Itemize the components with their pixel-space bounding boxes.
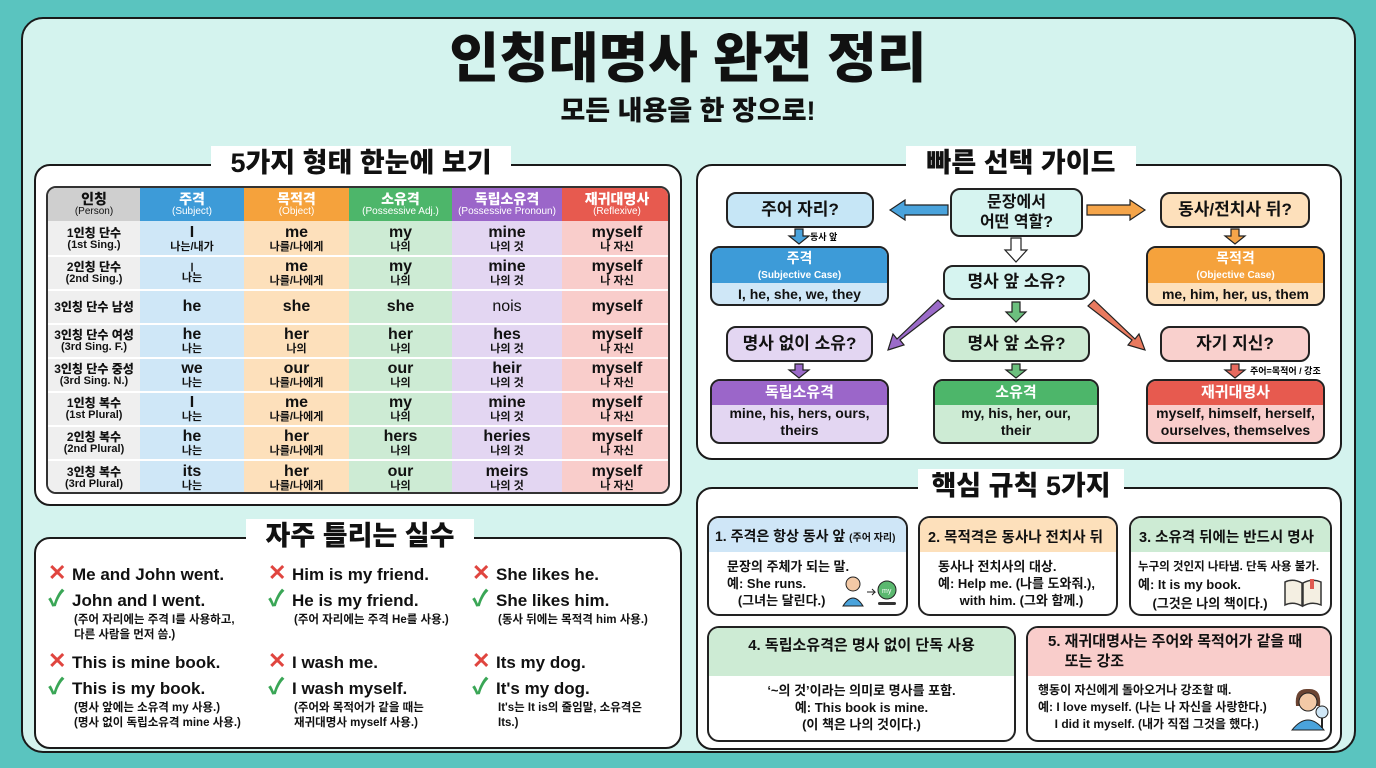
pronoun table: I [190,394,194,411]
pronoun table: he [183,428,201,445]
pronoun table: 재귀대명사 [585,191,649,207]
pronoun table: (2nd Sing.) [66,273,122,285]
pronoun table: 2인칭 복수 [67,430,121,444]
pronoun table: her [388,326,413,343]
icon: person to my: my [882,588,892,595]
pronoun table: 나 자신 [600,411,634,423]
mistake 6: ✓ [472,674,488,699]
mistake 6: Its my dog. [496,653,586,672]
pronoun table: 나의 [390,480,411,492]
flow: 자기 지신?: 자기 지신? [1196,334,1274,353]
pronoun table: 인칭 [81,191,107,207]
flow: 독립소유격 box: theirs [780,422,819,438]
flow: 재귀대명사 box: 재귀대명사 [1201,384,1270,401]
flow: 명사 없이 소유?: 명사 없이 소유? [743,334,856,353]
flow: 명사 앞 소유? top: 명사 앞 소유? [967,272,1066,291]
flow: 명사 앞 소유? green: 명사 앞 소유? [967,334,1066,353]
flow: center question: 어떤 역할? [980,214,1053,230]
pronoun table: myself [592,298,642,315]
arrows: flow: 주어=목적어 / 강조 [1250,365,1321,376]
mistake 1: ✓ [48,586,64,611]
pronoun table: 나를/나에게 [270,411,323,423]
mistake 5: ✓ [268,674,284,699]
flow: 명사 앞 소유? top [943,265,1090,300]
pronoun table: 나의 것 [490,343,524,355]
pronoun table: she [387,298,414,315]
pronoun table: 나의 것 [490,411,524,423]
rule 1 [707,516,908,616]
rows: (1st Sing.) [67,239,121,251]
flow: 명사 앞 소유? green [943,326,1090,362]
pronoun table: he [183,298,201,315]
mistake 5: (주어와 목적어가 같을 때는 [294,702,424,714]
pronoun table: her [284,463,309,480]
mistake 4: This is mine book. [72,653,220,672]
pronoun table: 나의 [286,343,307,355]
pronoun table: our [284,360,309,377]
pronoun table: 나는 [182,445,202,457]
pronoun table: 나의 [390,445,411,457]
pronoun table: mine [488,258,526,275]
pronoun table: 3인칭 복수 [67,465,121,479]
rule 3: (그것은 나의 책이다.) [1152,596,1268,611]
pronoun table: 나는 [182,343,202,355]
flow: 소유격 box [933,379,1099,444]
pronoun table: (2nd Plural) [64,443,124,455]
rows: 1인칭 단수 [67,226,121,240]
pronoun table: me [285,258,308,275]
pronoun table: 나는/내가 [170,241,214,253]
mistake 1 [48,560,235,641]
pronoun table: 나 자신 [600,275,634,287]
icon: book [1284,579,1322,608]
mistake 5 [268,648,424,729]
mistake 4: ✕ [48,648,66,673]
mistake 2: ✕ [268,560,286,585]
pronoun table: 2인칭 단수 [67,260,121,274]
panel: rules [696,487,1342,750]
pronoun table: myself [592,224,642,241]
pronoun table: my [389,394,412,411]
pronoun table: ꞁ [190,260,194,272]
flow: 독립소유격 box: 독립소유격 [765,384,834,401]
mistake 3 [472,560,648,626]
rule 1: (그녀는 달린다.) [738,593,825,608]
rule 1: 문장의 주체가 되는 말. [727,559,849,574]
flow: center question: 문장에서 [987,194,1046,211]
pronoun table: 나는 [182,272,202,284]
pronoun table: heries [483,428,531,445]
pronoun table: meirs [486,463,528,480]
mistake 2: Him is my friend. [292,565,429,584]
rule 1: 1. 주격은 항상 동사 앞 (주어 자리) [715,528,895,544]
mistake 5: I wash myself. [292,679,407,698]
pronoun table: (3rd Plural) [65,478,123,490]
pronoun table: 나는 [182,480,202,492]
mistake 3: She likes he. [496,565,599,584]
mistake 4: ✓ [48,674,64,699]
pronoun table: myself [592,360,642,377]
pronoun table: 나를/나에게 [270,275,323,287]
rule 4: 예: This book is mine. [795,700,928,715]
rule 1: 예: She runs. [727,576,806,591]
rule 2: 2. 목적격은 동사나 전치사 뒤 [928,530,1103,546]
flow: 소유격 box: their [1001,422,1031,438]
mistake 2: He is my friend. [292,591,419,610]
icon: person to my [842,576,896,606]
pronoun table: (Possessive Pronoun) [458,206,556,217]
heading: flow: 빠른 선택 가이드 [927,148,1115,178]
panel: flow guide [696,164,1342,460]
pronoun table: 나 자신 [600,445,634,457]
flow: 목적격 box: 목적격 [1216,250,1255,266]
flow: 주어 자리?: 주어 자리? [761,200,839,219]
pronoun table: (Possessive Adj.) [362,206,439,217]
pronoun table: my [389,224,412,241]
pronoun table: 나의 [390,411,411,423]
rule 3: 3. 소유격 뒤에는 반드시 명사 [1139,530,1314,546]
mistake 3: ✕ [472,560,490,585]
pronoun table: 나의 [390,343,411,355]
pronoun table: myself [592,463,642,480]
flow: 주격 box: (Subjective Case) [758,270,841,280]
arrows: flow: 동사 앞 [810,231,838,242]
mistake 6: It's는 It is의 줄임말, 소유격은 [498,702,642,714]
pronoun table: (3rd Sing. F.) [61,341,127,353]
pronoun table: myself [592,326,642,343]
flow: 자기 지신? [1160,326,1310,362]
pronoun table: 나의 것 [490,241,524,253]
pronoun table: (Object) [279,206,314,217]
mistake 5: 재귀대명사 myself 사용.) [294,717,418,729]
pronoun table: myself [592,428,642,445]
panel: table [34,164,682,506]
pronoun table: 3인칭 단수 중성 [54,362,134,376]
flow: 동사/전치사 뒤? [1160,192,1310,228]
pronoun table: 3인칭 단수 여성 [54,328,134,342]
rule 4: (이 책은 나의 것이다.) [802,717,921,732]
pronoun table: she [283,298,310,315]
pronoun table: 나를/나에게 [270,445,323,457]
pronoun table: (Person) [75,206,113,217]
pronoun table: 나의 [390,377,411,389]
pronoun table: 나 자신 [600,343,634,355]
rule 5 [1026,626,1332,742]
pronoun table: 나의 것 [490,275,524,287]
heading: rules: 핵심 규칙 5가지 [931,471,1111,501]
rule 2 [918,516,1118,616]
heading: mistakes: 자주 틀리는 실수 [266,521,454,551]
pronoun table: I [190,224,194,241]
heading: table: 5가지 형태 한눈에 보기 [230,148,492,178]
mistake 5: ✕ [268,648,286,673]
pronoun table: hers [384,428,417,445]
pronoun table: 나는 [182,411,202,423]
pronoun table: myself [592,258,642,275]
rule 3: 누구의 것인지 나타냄. 단독 사용 불가. [1138,561,1319,573]
rule 5: I did it myself. (내가 직접 그것을 했다.) [1055,717,1259,731]
mistake 6: Its.) [498,717,518,729]
rows [67,226,121,251]
flow: 소유격 box: my, his, her, our, [961,405,1071,421]
mistake 3: ✓ [472,586,488,611]
mistake 1: Me and John went. [72,565,224,584]
rule 4: ‘~의 것’이라는 의미로 명사를 포함. [767,683,956,698]
flow: 소유격 box: 소유격 [995,384,1037,401]
pronoun table: her [284,428,309,445]
pronoun table [46,186,670,494]
pronoun table: nois [492,298,522,315]
pronoun table: 3인칭 단수 남성 [54,300,134,314]
pronoun table: mine [488,224,526,241]
pronoun table: (Reflexive) [593,206,641,217]
mistake 1: John and I went. [72,591,205,610]
icon: woman with mirror [1291,689,1328,730]
pronoun table: 나의 [390,275,411,287]
pronoun table: 1인칭 복수 [67,396,121,410]
rule 2: 예: Help me. (나를 도와줘.), [938,576,1095,591]
pronoun table: (Subject) [172,206,212,217]
pronoun table: 목적격 [277,191,316,207]
pronoun table: 나의 것 [490,480,524,492]
mistake 1: ✕ [48,560,66,585]
rule 2: 동사나 전치사의 대상. [938,559,1056,574]
rule 2: with him. (그와 함께.) [960,593,1083,608]
flow: 독립소유격 box [710,379,889,444]
rule 3 [1129,516,1332,616]
mistake 2 [268,560,449,626]
pronoun table: 나 자신 [600,241,634,253]
pronoun table: mine [488,394,526,411]
pronoun table: me [285,394,308,411]
rule 5: 예: I love myself. (나는 나 자신을 사랑한다.) [1038,700,1267,714]
mistake 6: ✕ [472,648,490,673]
pronoun table: hes [493,326,521,343]
flow: 재귀대명사 box: ourselves, themselves [1161,422,1310,438]
pronoun table: her [284,326,309,343]
pronoun table: 독립소유격 [475,191,539,207]
flow: 주격 box [710,246,889,306]
mistake 4 [48,648,241,729]
pronoun table: 나는 [182,377,202,389]
pronoun table: 나 자신 [600,480,634,492]
pronoun table: 나의 것 [490,377,524,389]
mistake 4: This is my book. [72,679,205,698]
mistake 3: She likes him. [496,591,609,610]
pronoun table: 나를/나에게 [270,377,323,389]
flow: 목적격 box: (Objective Case) [1196,270,1275,280]
pronoun table: myself [592,394,642,411]
mistake 1: 다른 사람을 먼저 씀.) [74,629,175,641]
flow: 주어 자리? [726,192,874,228]
flow: 목적격 box: me, him, her, us, them [1162,286,1309,302]
pronoun table: 나를/나에게 [270,480,323,492]
pronoun table: my [389,258,412,275]
mistake 2: (주어 자리에는 주격 He를 사용.) [294,614,449,626]
pronoun table: me [285,224,308,241]
pronoun table: 나 자신 [600,377,634,389]
subtitle: 모든 내용을 한 장으로! [560,96,816,126]
pronoun table: our [388,360,413,377]
flow: 독립소유격 box: mine, his, hers, ours, [729,405,870,421]
pronoun table: its [183,463,201,480]
pronoun table: our [388,463,413,480]
pronoun table: 나를/나에게 [270,241,323,253]
mistake 4: (명사 앞에는 소유격 my 사용.) [74,702,220,714]
flow: 동사/전치사 뒤?: 동사/전치사 뒤? [1178,200,1292,219]
mistake 5: I wash me. [292,653,378,672]
pronoun table: (3rd Sing. N.) [60,375,128,387]
flow: 주격 box: I, he, she, we, they [738,286,861,302]
pronoun table: we [181,360,203,377]
mistake 6: It's my dog. [496,679,590,698]
title: 인칭대명사 완전 정리 [449,29,927,89]
rule 4: 4. 독립소유격은 명사 없이 단독 사용 [748,637,975,654]
flow: 명사 없이 소유? [726,326,873,362]
pronoun table: he [183,326,201,343]
pronoun table: 나의 [390,241,411,253]
flow: center question [950,188,1083,237]
pronoun table: 주격 [179,191,205,207]
rule 5: 5. 재귀대명사는 주어와 목적어가 같을 때 [1048,633,1302,650]
pronoun table: 나의 것 [490,445,524,457]
flow: 재귀대명사 box [1146,379,1325,444]
flow: 목적격 box [1146,246,1325,306]
pronoun table: (1st Plural) [66,409,122,421]
flow: 재귀대명사 box: myself, himself, herself, [1156,405,1315,421]
mistake 4: (명사 없이 독립소유격 mine 사용.) [74,717,241,729]
rule 5: 행동이 자신에게 돌아오거나 강조할 때. [1038,683,1231,697]
panel: mistakes [34,537,682,749]
rule 4 [707,626,1016,742]
flow: 주격 box: 주격 [787,250,812,266]
rule 3: 예: It is my book. [1138,577,1241,592]
rule 5: 또는 강조 [1065,653,1124,670]
pronoun table: 소유격 [381,191,420,207]
mistake 3: (동사 뒤에는 목적격 him 사용.) [498,614,648,626]
mistake 6 [472,648,642,729]
pronoun table: heir [492,360,522,377]
mistake 2: ✓ [268,586,284,611]
mistake 1: (주어 자리에는 주격 I를 사용하고, [74,614,235,626]
